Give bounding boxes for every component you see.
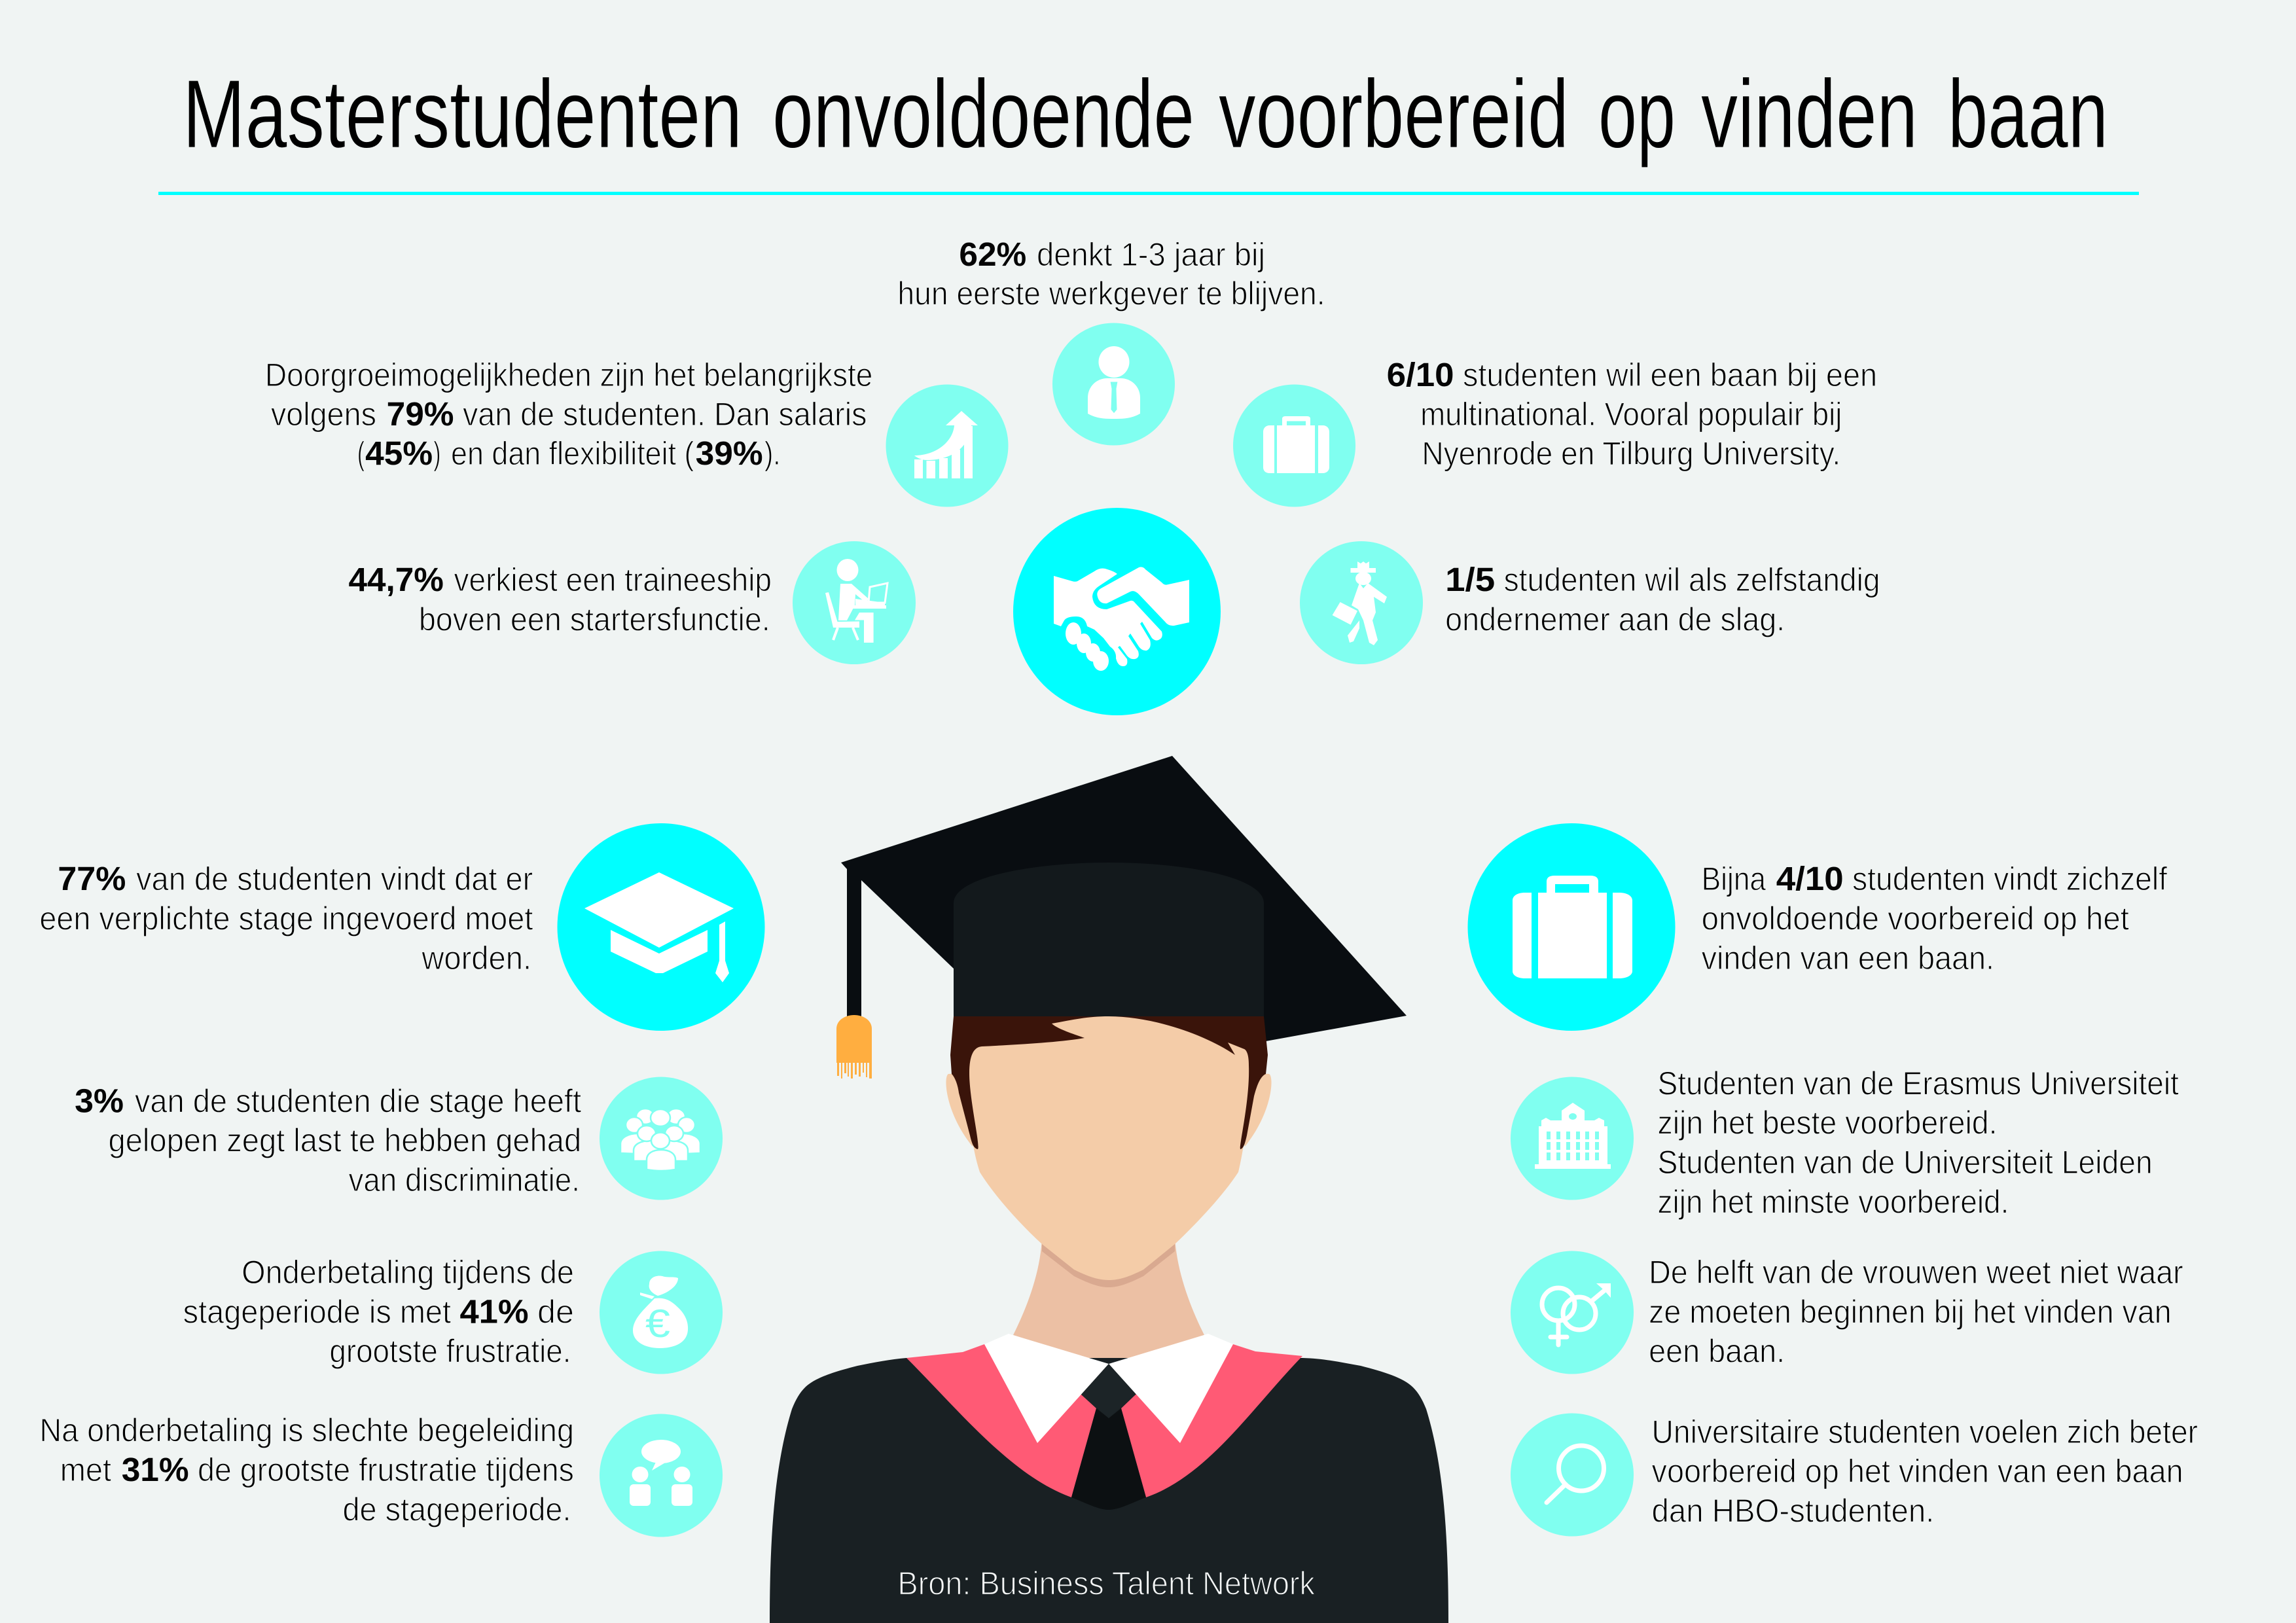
text: mandatory internship: [39, 860, 533, 976]
text: growth opportunities: ): [433, 435, 440, 472]
icon: walking entrepreneur: [1300, 541, 1423, 664]
title: [183, 60, 2108, 168]
icon: money bag: €: [645, 1302, 670, 1346]
text: women: [1649, 1254, 2183, 1370]
graduate figure: [770, 756, 1448, 1623]
cap board: [841, 756, 1407, 1041]
text: unprepared: Bijna: [1702, 861, 1766, 897]
hair: [950, 1016, 1268, 1149]
text: multinational: Nyenrode en Tilburg University.: [1422, 435, 1840, 472]
text: self-employed: [1445, 561, 1880, 637]
text: poor guidance: met: [60, 1452, 111, 1488]
neck shadow: [1042, 1237, 1175, 1287]
icon: student at desk: [793, 541, 916, 664]
icon: university building: [1511, 1077, 1634, 1200]
title: baan: [1948, 60, 2108, 168]
icon: money bag: [600, 1251, 723, 1374]
text: Erasmus and Leiden: zijn het minste voorbereid.: [1658, 1184, 2009, 1221]
text: multinational: 6/10: [1387, 356, 1454, 393]
text: poor guidance: Na onderbetaling is slechte begeleiding: [39, 1412, 574, 1449]
text: university vs HBO: dan HBO-studenten.: [1652, 1493, 1934, 1529]
text: women: een baan.: [1649, 1333, 1785, 1370]
icon: small briefcase: [1233, 385, 1355, 507]
text: unprepared: vinden van een baan.: [1702, 940, 1994, 976]
text: mandatory internship: een verplichte stage ingevoerd moet: [39, 901, 533, 937]
text: mandatory internship: worden.: [421, 940, 531, 976]
text: underpayment: de: [537, 1293, 574, 1330]
title: Masterstudenten: [183, 60, 742, 168]
text: discrimination: van de studenten die stage heeft: [135, 1083, 581, 1120]
text: unprepared: 4/10: [1776, 860, 1844, 897]
text: growth opportunities: Doorgroeimogelijkheden zijn het belangrijkste: [265, 357, 872, 393]
gown: [770, 1358, 1448, 1623]
text: discrimination: van discriminatie.: [348, 1162, 580, 1198]
icon: large briefcase: [1467, 823, 1676, 1031]
ears: [946, 1073, 1272, 1147]
text: growth opportunities: [265, 357, 872, 472]
text: 62% first employer: 62%: [959, 236, 1026, 273]
title: op: [1598, 60, 1676, 168]
text: growth opportunities: ).: [764, 435, 780, 472]
icon: businessman: [1052, 323, 1175, 445]
text: 62% first employer: denkt 1-3 jaar bij: [1037, 236, 1265, 273]
text: poor guidance: 31%: [122, 1451, 189, 1488]
text: traineeship: [348, 561, 772, 637]
text: multinational: studenten wil een baan bij een: [1463, 357, 1877, 393]
neck: [1013, 1237, 1204, 1365]
text: unprepared: onvoldoende voorbereid op het: [1702, 901, 2129, 937]
text: Erasmus and Leiden: zijn het beste voorbereid.: [1658, 1105, 1998, 1141]
text: women: De helft van de vrouwen weet niet waar: [1649, 1254, 2183, 1291]
text: Erasmus and Leiden: [1658, 1065, 2179, 1221]
text: unprepared: [1702, 860, 2167, 976]
tassel cord: [847, 865, 861, 1022]
text: mandatory internship: van de studenten vindt dat er: [136, 861, 533, 897]
text: university vs HBO: voorbereid op het vinden van een baan: [1652, 1453, 2183, 1489]
text: growth opportunities: van de studenten. Dan salaris: [463, 396, 867, 433]
icon: growth chart: [886, 385, 1008, 507]
title: vinden: [1701, 60, 1918, 168]
tie: [1071, 1408, 1146, 1510]
white collar: [984, 1334, 1233, 1443]
text: underpayment: [183, 1254, 574, 1370]
icon: magnifier: [1511, 1414, 1634, 1537]
text: underpayment: 41%: [459, 1293, 529, 1330]
text: multinational: [1387, 356, 1877, 472]
cap crown: [954, 863, 1264, 1016]
text: university vs HBO: [1652, 1414, 2198, 1529]
text: Erasmus and Leiden: Studenten van de Universiteit Leiden: [1658, 1144, 2153, 1181]
text: traineeship: boven een startersfunctie.: [419, 601, 770, 637]
icon: conversation: [600, 1414, 723, 1537]
text: traineeship: 44,7%: [348, 561, 444, 598]
text: poor guidance: [39, 1412, 574, 1527]
title: voorbereid: [1219, 60, 1569, 168]
text: discrimination: [75, 1082, 581, 1198]
text: unprepared: studenten vindt zichzelf: [1852, 861, 2167, 897]
title: onvoldoende: [772, 60, 1194, 168]
text: growth opportunities: 79%: [387, 395, 454, 433]
text: underpayment: stageperiode is met: [183, 1293, 451, 1330]
text: growth opportunities: volgens: [271, 396, 376, 433]
text: mandatory internship: 77%: [58, 860, 126, 897]
text: growth opportunities: 45%: [365, 435, 433, 472]
text: self-employed: ondernemer aan de slag.: [1445, 601, 1785, 637]
icon: handshake: [1013, 508, 1221, 715]
text: 62% first employer: hun eerste werkgever te blijven.: [897, 275, 1325, 312]
text: poor guidance: de grootste frustratie tijdens: [198, 1452, 574, 1488]
text: growth opportunities: 39%: [696, 435, 763, 472]
text: self-employed: studenten wil als zelfstandig: [1504, 562, 1880, 598]
face: [962, 1016, 1255, 1280]
text: discrimination: 3%: [75, 1082, 124, 1120]
text: underpayment: grootste frustratie.: [329, 1333, 571, 1370]
tie knot: [1081, 1364, 1136, 1418]
text: discrimination: gelopen zegt last te hebben gehad: [109, 1122, 581, 1159]
icon: graduation cap: [558, 823, 764, 1031]
text: university vs HBO: Universitaire studenten voelen zich beter: [1652, 1414, 2198, 1450]
tassel: [836, 1015, 872, 1079]
text: self-employed: 1/5: [1445, 561, 1495, 598]
text: traineeship: verkiest een traineeship: [454, 562, 772, 598]
text: 62% first employer: [897, 236, 1325, 312]
text: poor guidance: de stageperiode.: [343, 1491, 571, 1527]
text: women: ze moeten beginnen bij het vinden van: [1649, 1293, 2172, 1330]
text: growth opportunities: en dan flexibiliteit (: [451, 435, 694, 472]
text: Erasmus and Leiden: Studenten van de Erasmus Universiteit: [1658, 1065, 2179, 1101]
pink lapel left: [906, 1344, 1096, 1497]
text: growth opportunities: (: [357, 435, 365, 472]
source text: Bron: Business Talent Network: [897, 1565, 1316, 1601]
pink lapel right: [1121, 1344, 1302, 1497]
text: underpayment: Onderbetaling tijdens de: [242, 1254, 574, 1291]
text: multinational: multinational. Vooral populair bij: [1420, 396, 1842, 433]
icon: crowd: [600, 1077, 723, 1200]
icon: gender symbols: [1511, 1251, 1634, 1374]
